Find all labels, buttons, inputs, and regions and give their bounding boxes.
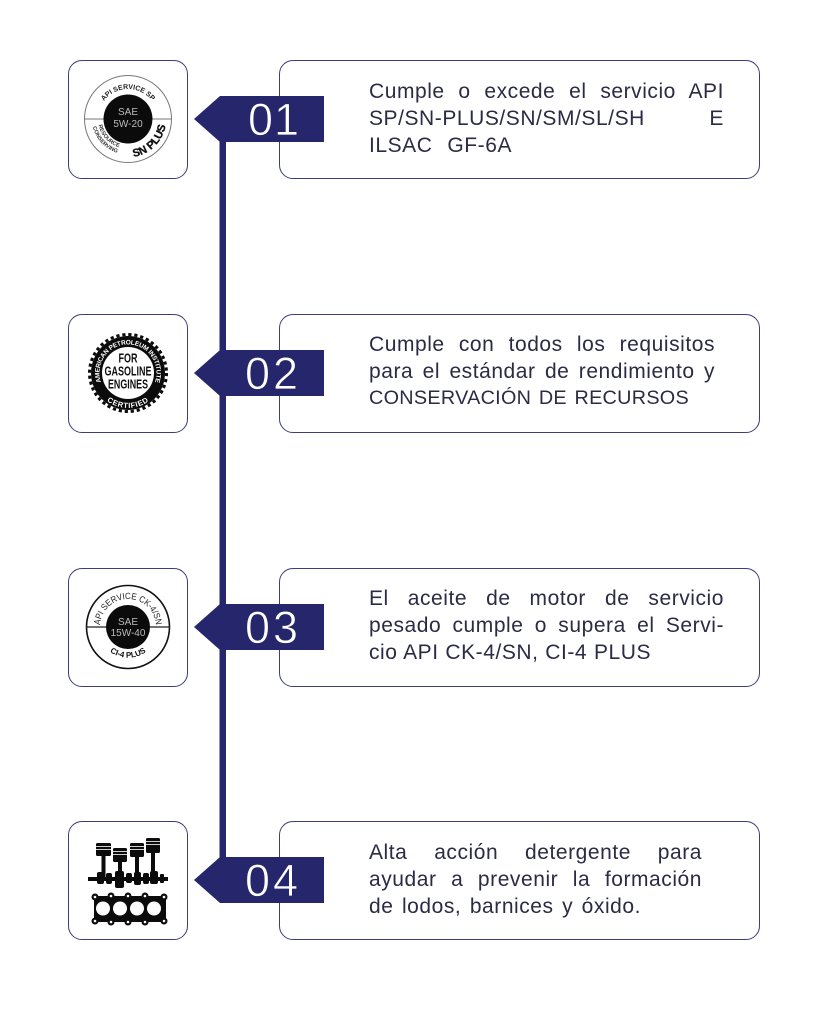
text block 4: Alta acción detergente para (369, 841, 702, 864)
marker 01: 01 (248, 94, 300, 145)
text block 2: para el estándar de rendimiento y (369, 360, 715, 383)
icon: API SN Plus seal: API SERVICE SP (102, 84, 155, 101)
icon: API gasoline certified seal: ENGINES (108, 376, 148, 392)
icon: API SN Plus seal (84, 75, 172, 163)
text block 4: ayudar a prevenir la formación (369, 868, 702, 891)
panel: text card 4 (279, 821, 760, 940)
text block 1: ILSAC GF-6A (369, 134, 512, 157)
icon: API gasoline certified seal: GASOLINE (104, 364, 152, 378)
icon: API SN Plus seal: CONSERVING (93, 126, 118, 152)
text block 1: SP/SN-PLUS/SN/SM/SL/SH E (369, 107, 724, 130)
marker 03: 03 (245, 602, 301, 653)
text block 2: Cumple con todos los requisitos (369, 333, 715, 356)
panel: text card 2 (279, 314, 760, 433)
icon: API SN Plus seal: SAE (118, 107, 138, 118)
icon: API gasoline certified seal (88, 333, 168, 413)
marker 04 (194, 855, 324, 906)
icon: API SN Plus seal: 5W-20 (113, 119, 143, 130)
text block 3: pesado cumple o supera el Servi- (369, 614, 724, 637)
panel: icon card 2 (68, 314, 188, 433)
text block 4 (369, 841, 702, 918)
timeline vertical bar (220, 130, 226, 865)
icon: API SN Plus seal: RESOURCE (98, 124, 120, 148)
text block 4: de lodos, barnices y óxido. (369, 895, 641, 918)
icon: API gasoline certified seal: CERTIFIED (108, 398, 148, 408)
text block 3 (369, 587, 724, 664)
icon: API CK-4 seal (86, 584, 170, 670)
panel: icon card 1 (68, 60, 188, 179)
marker 04: 04 (245, 855, 301, 906)
panel: icon card 4 (68, 821, 188, 940)
icon: API gasoline certified seal: AMERICAN PETROLEUM INSTITUTE (94, 340, 161, 383)
text block 2 (369, 333, 715, 409)
panel: icon card 3 (68, 568, 188, 687)
panel: text card 1 (279, 60, 760, 179)
marker 03 (194, 602, 324, 653)
marker 01 (194, 94, 324, 145)
icon: engine pistons and block (88, 838, 168, 926)
text block 1: Cumple o excede el servicio API (369, 80, 724, 103)
icon: API SN Plus seal: SN PLUS (132, 124, 166, 157)
icon: API CK-4 seal: CI-4 PLUS (110, 648, 146, 658)
icon: API gasoline certified seal: FOR (118, 350, 138, 366)
icon: API CK-4 seal: 15W-40 (111, 628, 146, 639)
text block 3: cio API CK-4/SN, CI-4 PLUS (369, 641, 651, 664)
marker 02 (194, 348, 324, 399)
text block 3: El aceite de motor de servicio (369, 587, 724, 610)
icon: API CK-4 seal: API SERVICE CK-4/SN (94, 592, 162, 626)
marker 02: 02 (245, 348, 301, 399)
text block 2: CONSERVACIÓN DE RECURSOS (369, 387, 689, 409)
text block 1 (369, 80, 724, 157)
panel: text card 3 (279, 568, 760, 687)
icon: API CK-4 seal: SAE (118, 617, 138, 628)
